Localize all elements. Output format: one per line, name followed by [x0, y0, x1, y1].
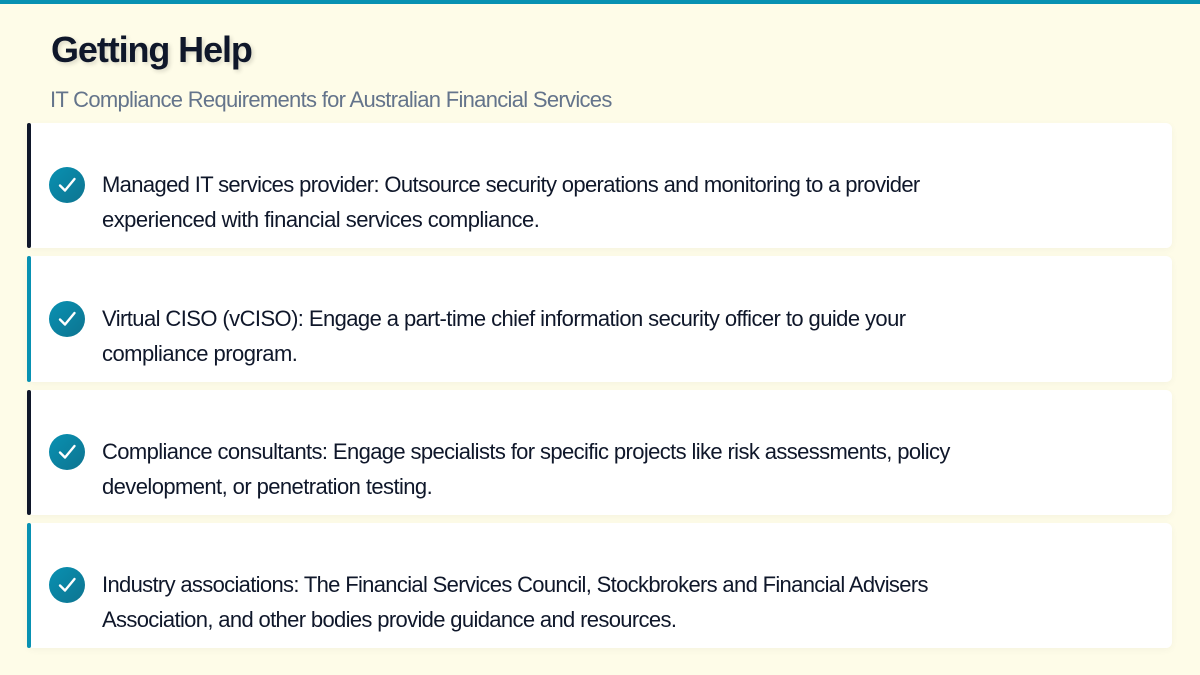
left accent bar: [27, 523, 31, 648]
text block: Compliance consultants: Engage specialists for specific projects like risk assessments, policy: [102, 439, 950, 464]
text block: [102, 439, 950, 499]
panel: compliance consultants: [27, 390, 1172, 515]
text block: Industry associations: The Financial Services Council, Stockbrokers and Financial Advisers: [102, 572, 928, 597]
text block: compliance program.: [102, 341, 297, 366]
text block: [102, 172, 920, 232]
text block: Managed IT services provider: Outsource security operations and monitoring to a provider: [102, 172, 920, 197]
text block: Association, and other bodies provide guidance and resources.: [102, 607, 676, 632]
top accent bar: [0, 0, 1200, 4]
icon: check circle: [49, 301, 85, 337]
panel: virtual CISO: [27, 256, 1172, 382]
left accent bar: [27, 390, 31, 515]
left accent bar: [27, 256, 31, 382]
text block: development, or penetration testing.: [102, 474, 432, 499]
icon: check circle: [49, 567, 85, 603]
panel: industry associations: [27, 523, 1172, 648]
title: Getting Help: [51, 29, 252, 70]
subtitle: IT Compliance Requirements for Australian Financial Services: [50, 87, 612, 112]
text block: [102, 572, 928, 632]
text block: Virtual CISO (vCISO): Engage a part-time chief information security officer to guide your: [102, 306, 906, 331]
left accent bar: [27, 123, 31, 248]
icon: check circle: [49, 167, 85, 203]
icon: check circle: [49, 434, 85, 470]
panel: managed IT services provider: [27, 123, 1172, 248]
text block: experienced with financial services compliance.: [102, 207, 539, 232]
text block: [102, 306, 906, 366]
